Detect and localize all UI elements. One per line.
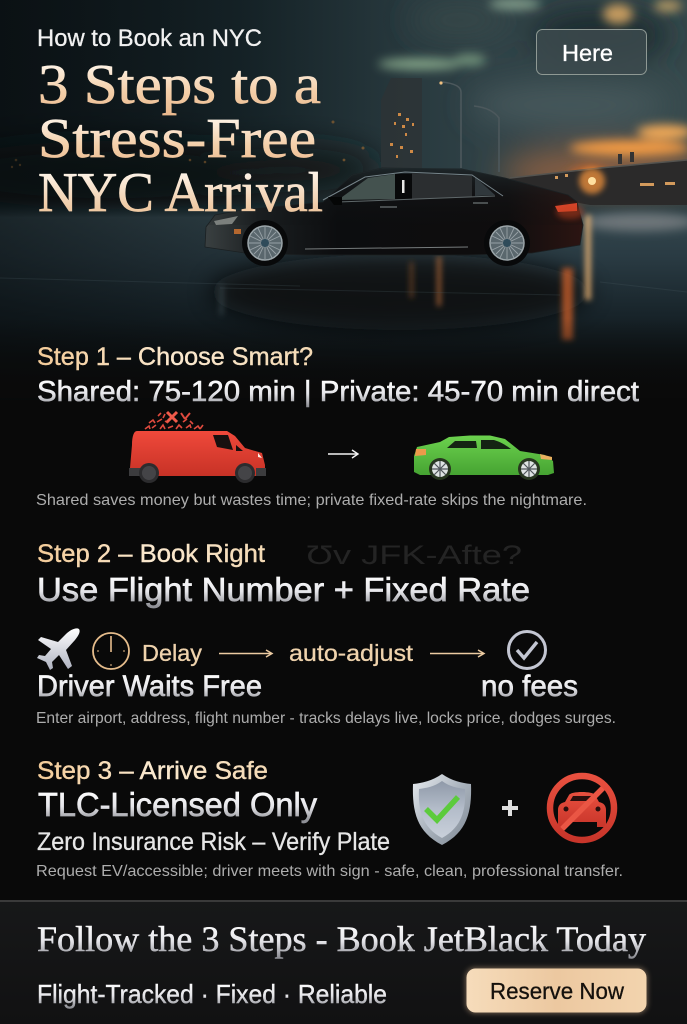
icon: shield with check (413, 774, 471, 845)
car reflection (210, 215, 591, 340)
black limousine (205, 168, 584, 266)
auto-adjust label: auto-adjust (289, 640, 413, 666)
step 3 heading: Step 3 – Arrive Safe (37, 757, 268, 785)
no fees label: no fees (481, 670, 578, 703)
panel: step 1 (36, 343, 639, 509)
footer headline: Follow the 3 Steps - Book JetBlack Today (37, 919, 646, 959)
icon: clock (93, 633, 129, 669)
distant lights on the left (11, 120, 365, 168)
step 2 heading: Step 2 – Book Right (37, 540, 265, 568)
icon: check circle (508, 632, 546, 668)
step 2 headline: Use Flight Number + Fixed Rate (37, 571, 530, 608)
tower (381, 78, 422, 168)
main title: Stress-Free (38, 108, 316, 170)
button: Here: Here (562, 40, 613, 66)
button: Here (536, 30, 646, 74)
icon: red shared van with stress marks (129, 412, 266, 483)
panel: hero night scene (0, 0, 687, 400)
step 3 caption: Request EV/accessible; driver meets with sign - safe, clean, professional transfer. (36, 863, 623, 880)
driver waits free label: Driver Waits Free (37, 670, 262, 703)
step 2 caption: Enter airport, address, flight number - tracks delays live, locks price, dodges surges. (36, 710, 616, 727)
icon: green private car (414, 436, 554, 480)
overpass bridge (510, 152, 687, 205)
step 1 heading: Step 1 – Choose Smart? (37, 343, 313, 371)
arrow: delay to auto-adjust (219, 650, 272, 657)
arrow: van to car (328, 450, 358, 458)
panel: step 3 (36, 757, 623, 880)
plus sign (502, 800, 518, 816)
panel: step 2 (36, 540, 616, 727)
button: Reserve Now: Reserve Now (490, 978, 624, 1004)
eyebrow heading: How to Book an NYC (37, 25, 262, 52)
ghost text: Ʊv JFK-Afte? (306, 540, 522, 570)
icon: prohibited car (550, 776, 614, 840)
button: Reserve Now (466, 968, 647, 1013)
footer tagline: Flight-Tracked · Fixed · Reliable (37, 979, 387, 1009)
arrow: auto-adjust to check (430, 650, 484, 657)
step 1 comparison headline: Shared: 75-120 min | Private: 45-70 min direct (37, 376, 639, 408)
street lamps (439, 81, 499, 172)
main title (38, 54, 323, 224)
wet streaks (0, 278, 687, 295)
step 3 headline: TLC-Licensed Only (38, 786, 317, 823)
icon: airplane (37, 628, 80, 670)
main title: NYC Arrival (38, 162, 323, 224)
step 3 subheadline: Zero Insurance Risk – Verify Plate (37, 828, 390, 856)
panel: footer call to action (0, 900, 687, 1024)
delay label: Delay (142, 640, 202, 666)
main title: 3 Steps to a (38, 54, 321, 116)
step 1 caption: Shared saves money but wastes time; private fixed-rate skips the nightmare. (36, 492, 587, 509)
